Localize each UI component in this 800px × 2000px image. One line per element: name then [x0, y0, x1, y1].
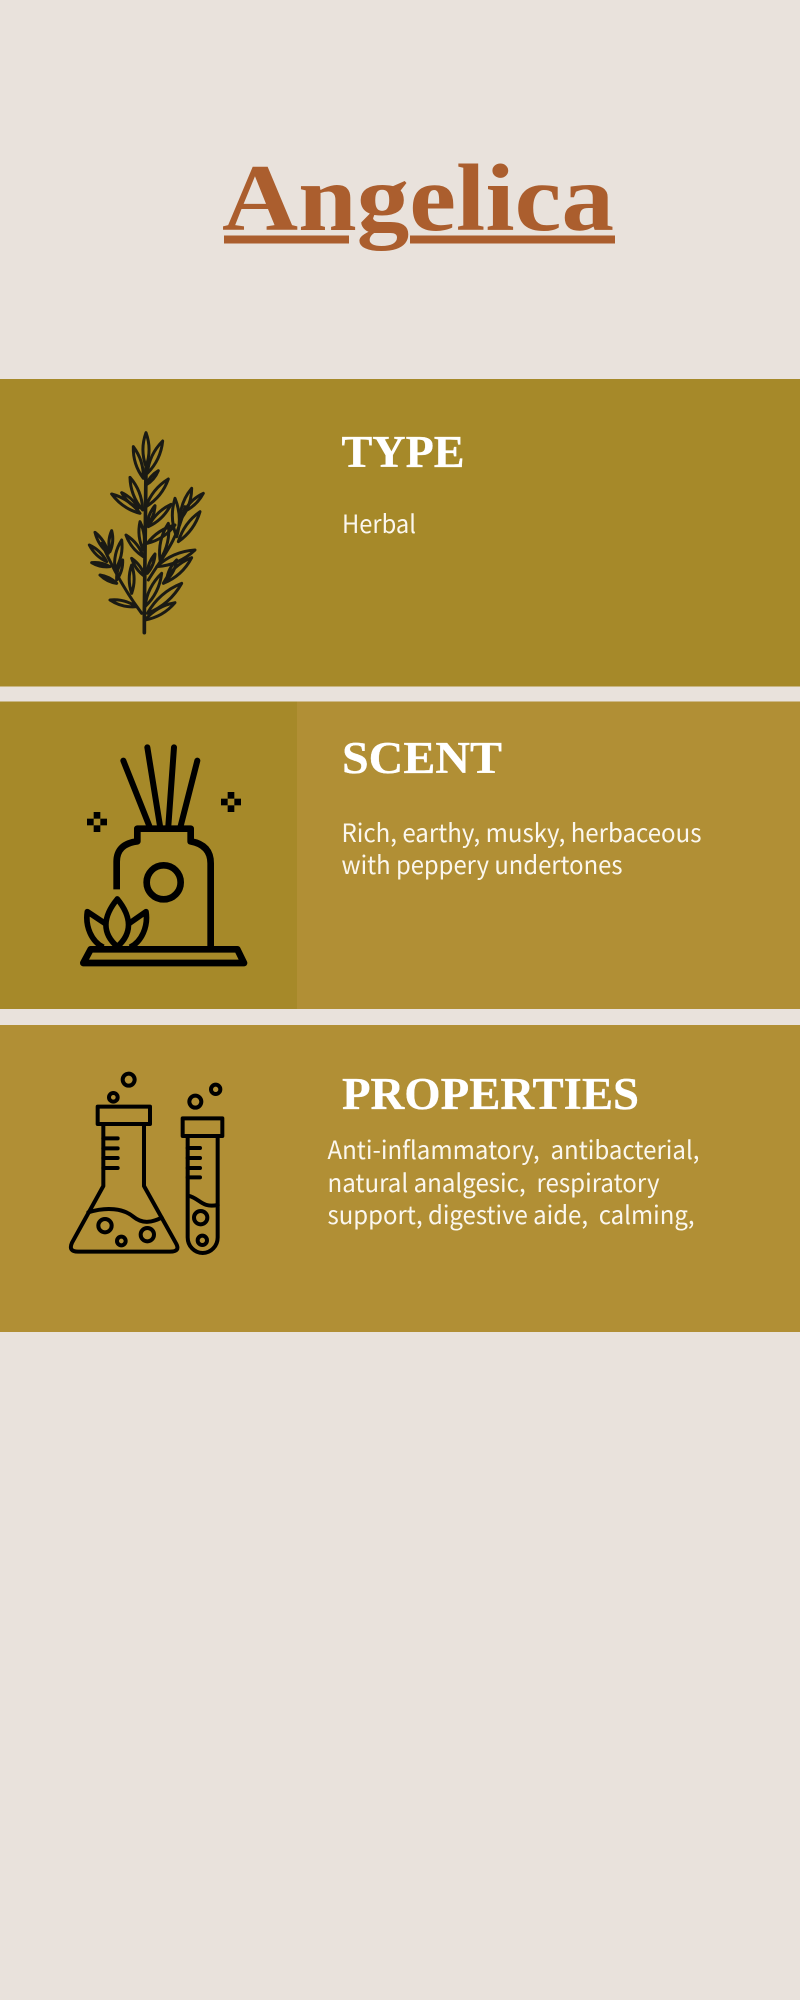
- text: scent description: [342, 814, 702, 882]
- icon: lab flask and test tube: [71, 1074, 222, 1253]
- text: scent description: with peppery undertones: [342, 846, 622, 882]
- text: properties description: [328, 1131, 700, 1232]
- icon: herb sprig: [89, 433, 203, 633]
- text: properties description: natural analgesic, respiratory: [328, 1164, 660, 1200]
- panel: scent: [0, 702, 800, 1009]
- text: properties description: Anti-inflammatory, antibacterial,: [328, 1131, 700, 1167]
- panel: type: [0, 379, 800, 686]
- title: Angelica: [222, 145, 614, 251]
- heading: properties: PROPERTIES: [342, 1069, 639, 1119]
- heading: scent: SCENT: [342, 733, 502, 783]
- icon: reed diffuser: [83, 747, 244, 963]
- text: scent description: Rich, earthy, musky, herbaceous: [342, 814, 702, 850]
- panel: properties: [0, 1025, 800, 1332]
- icon column background: [0, 702, 297, 1009]
- text: type value: Herbal: [342, 505, 416, 541]
- heading: type: TYPE: [342, 427, 464, 477]
- text: properties description: support, digestive aide, calming,: [328, 1196, 694, 1232]
